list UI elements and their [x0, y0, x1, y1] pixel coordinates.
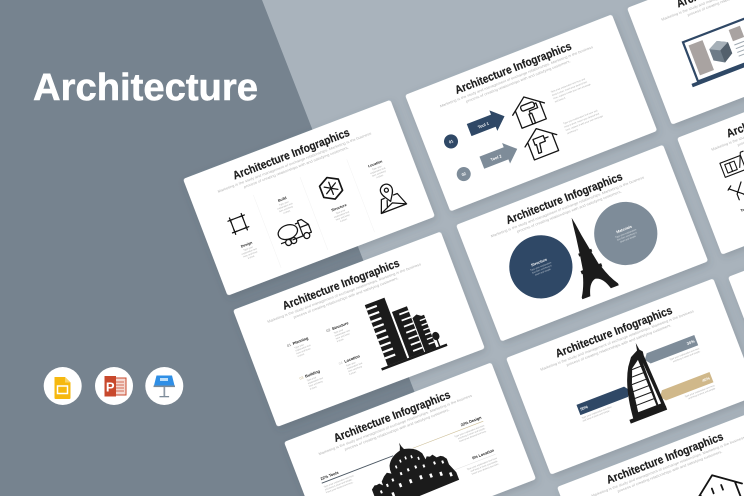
item: building: it short. [310, 385, 318, 391]
item: building: 03 [299, 376, 304, 381]
bar: 30% gray [643, 335, 702, 372]
text block 1: and keep it. [554, 96, 567, 103]
callout: 22% design: Type your explanation text here [454, 424, 486, 438]
callout: 22% design: Insert your desired text here. [459, 430, 487, 443]
panel: design build structure location [183, 100, 435, 296]
card heading: Architecture Infographics [453, 41, 573, 97]
callout: 6% location: Insert your desired text here. [471, 462, 500, 476]
illustration: laptop with cube [676, 4, 744, 87]
card heading: Architecture Infographics [281, 258, 401, 313]
circle: materials: short and simple [620, 235, 637, 244]
build label: explanation text [277, 202, 293, 211]
text block 2: here, replace it with your own message [565, 114, 604, 132]
card subtitle: Marketing is the study and management of exchange relationships. Marketing is the business [318, 394, 473, 456]
card heading: Architecture Infographics [605, 431, 725, 487]
card heading: Architecture Infographics [554, 305, 674, 360]
icon: Keynote [145, 367, 183, 405]
bar: 40% tan: Type your explanation text here [684, 384, 716, 398]
card subtitle: process of creating relationships with and satisfying customers. [243, 145, 349, 189]
item: planning: explanation text [295, 344, 311, 352]
circle: structure: Type your explanation [530, 261, 552, 272]
text block 2: and keep it. [567, 128, 579, 135]
bar: 40% tan: 40% [701, 375, 711, 383]
card subtitle: Marketing is the study and management of exchange relationships. Marketing is the business [490, 175, 645, 238]
icon: map pin [372, 180, 407, 214]
illustration: buildings skyline [358, 283, 448, 371]
structure label: explanation text [334, 210, 350, 219]
callout: 6% location: Type your explanation text here [467, 457, 498, 471]
item: building: Type your [306, 376, 317, 382]
panel: tower bars [506, 278, 744, 475]
icon: PowerPoint: P [106, 380, 115, 394]
arrow: tool 1: Tool 1 [477, 120, 490, 130]
structure label: it short. [340, 217, 348, 223]
circle: materials: text here and keep it [617, 231, 637, 242]
card subtitle: process of creating relationships with and satisfying customers. [516, 189, 622, 234]
bar: 30% gray: and keep it short and simple. [673, 350, 701, 363]
bar: 50% navy: Type your explanation text here [581, 405, 613, 420]
circle: materials [585, 193, 667, 274]
design label [238, 240, 260, 262]
app icons row [44, 367, 183, 405]
card subtitle: Marketing is the study and management of exchange relationships. Marketing is the business [267, 262, 422, 324]
text block 1: here, replace it with your own message [553, 83, 592, 100]
callout: 6% location [443, 447, 500, 484]
text block 1: keep it short. Insert your desired text [552, 81, 588, 97]
icon: house outline [690, 466, 744, 496]
item: structure: explanation text [334, 329, 351, 338]
icon: Google Slides [44, 367, 82, 405]
structure label: Type your [335, 209, 346, 215]
build label: Build [277, 196, 287, 203]
callout: 22% design: 22% Design [460, 415, 483, 427]
item: location: Location [343, 353, 361, 364]
card subtitle: process of creating relationships with and satisfying customers. [617, 450, 723, 493]
callout: 22% design: and keep it short and simple. [458, 427, 486, 440]
location label [367, 159, 388, 181]
circle: materials: Materials [616, 225, 633, 234]
card heading: Architecture Infographics [504, 171, 624, 227]
bar: 50% navy [576, 385, 635, 423]
circle: structure: short and simple [535, 268, 552, 277]
item: planning [286, 335, 314, 360]
item: location: it short. [349, 370, 357, 376]
arrow: tool 1 [465, 106, 509, 140]
design label: here and keep [243, 250, 258, 258]
arrow: tool 2: Tool 2 [490, 153, 503, 162]
location label: it short. [376, 174, 384, 179]
bar: 30% gray: Type your explanation text here [669, 347, 701, 361]
build label: it short. [283, 209, 292, 215]
item: planning: 01 [287, 343, 292, 348]
circle: structure [500, 226, 582, 308]
build label: Type your [279, 200, 289, 207]
icon: pliers and wrench [727, 180, 744, 206]
item: structure: 02 [326, 328, 331, 333]
item: planning: Planning [292, 335, 310, 346]
design label: explanation text [241, 247, 258, 256]
icon: design frame [227, 213, 250, 235]
card subtitle: process of creating relationships with and satisfying customers. [566, 323, 672, 367]
item: planning: it short. [297, 352, 306, 358]
design label: Type your [243, 246, 254, 252]
item: building [299, 368, 326, 393]
icon: hexagon structure [318, 174, 345, 203]
callout: 22% tools [319, 449, 397, 494]
design label: Design [240, 241, 253, 249]
location label: explanation text [370, 167, 386, 175]
panel: far right card edge [728, 197, 744, 394]
item: location: 04 [338, 361, 343, 366]
icon: blueprint [719, 151, 744, 177]
arrow: tool 2 [478, 139, 521, 173]
bar: 50% navy: and keep it short and simple. [582, 409, 611, 423]
text block 2: keep it short. Insert your desired text [564, 112, 600, 129]
item: building: Building [304, 368, 321, 379]
panel: dome chart [284, 362, 536, 496]
card subtitle: process of creating relationships with and satisfying customers. [344, 408, 450, 452]
icon: house with paint roller [508, 91, 550, 130]
structure label: here and keep [335, 213, 351, 222]
text block 1 [550, 76, 593, 103]
bar: 40% tan: and keep it short and simple. [688, 387, 717, 400]
callout: 22% tools: and keep it short and simple. [324, 478, 353, 491]
callout: 6% location: 6% Location [471, 447, 495, 460]
card subtitle: Marketing is the study and management of exchange relationships. Marketing is the business [439, 45, 594, 108]
location label: here and keep [372, 169, 387, 178]
item: building: here and keep [308, 380, 324, 388]
callout: 22% tools: Type your explanation text here [323, 474, 355, 489]
card heading: Architecture Infographics [332, 389, 452, 445]
card subtitle: Marketing is the study and management of exchange relationships. Marketing is the business [217, 131, 372, 194]
callout: 6% location: and keep it short and simple. [470, 460, 499, 473]
circle: structure: text here and keep it [532, 264, 552, 275]
card subtitle: Marketing is the study and management of exchange relationships. Marketing is the business [540, 309, 695, 372]
card subtitle: process of creating relationships with and satisfying customers. [465, 59, 571, 104]
number badge 01: 01 [448, 138, 455, 145]
card heading: Architecture Infographics [231, 127, 352, 182]
bar: 40% tan [658, 372, 717, 409]
build label: here and keep [279, 205, 294, 213]
item: structure: Structure [331, 320, 350, 331]
circle: materials: Type your explanation [615, 228, 638, 239]
bar: 30% gray: 30% [686, 338, 696, 346]
number badge 02: 02 [461, 171, 467, 177]
panel: tool arrows and houses [405, 14, 657, 211]
item: structure: it short. [336, 338, 345, 343]
bar: 50% navy: 50% [579, 404, 589, 412]
item: location: here and keep [348, 365, 363, 373]
heading: Architecture: Architecture [33, 67, 258, 109]
build label [274, 195, 296, 216]
number badge 01 [442, 132, 460, 151]
panel: right card with tool icons [677, 58, 744, 255]
item: building: explanation text [307, 377, 324, 385]
panel: bottom house card [557, 407, 744, 496]
icon: concrete truck [276, 218, 313, 248]
text block 2: Type your explanation text here and [563, 109, 599, 125]
item: location [338, 353, 366, 378]
design label: it short. [247, 254, 256, 260]
item: location: explanation text [347, 362, 363, 370]
card subtitle: process of creating relationships with and satisfying customers. [293, 276, 399, 319]
item: planning: Type your [294, 343, 305, 350]
item: structure: here and keep [335, 332, 351, 340]
location label: Type your [372, 165, 382, 171]
callout: 22% design [410, 415, 488, 459]
item: planning: here and keep [296, 347, 312, 355]
callout: 22% tools: 22% Tools [320, 470, 339, 481]
callout: 22% tools: Insert your desired text here. [325, 481, 354, 494]
item: location: Type your [346, 361, 356, 368]
item: structure: Type your [333, 328, 344, 335]
text block 2 [563, 108, 605, 135]
text block 1: Type your explanation text here and [550, 77, 586, 94]
location label: Location [368, 159, 383, 168]
item: structure [326, 320, 354, 345]
number badge 02 [455, 165, 473, 183]
structure label: Structure [331, 203, 347, 212]
background: light diagonal panel [262, 0, 744, 496]
icon: house with drill [520, 122, 562, 161]
panel: Eiffel tower circles [456, 145, 708, 342]
panel: laptop card [627, 0, 744, 125]
illustration: sail tower [604, 341, 667, 424]
illustration: domed cathedral [360, 427, 460, 496]
panel: buildings [233, 232, 485, 427]
circle: structure: Structure [531, 258, 548, 267]
icon: Eiffel tower [553, 211, 619, 299]
structure label [331, 203, 352, 225]
